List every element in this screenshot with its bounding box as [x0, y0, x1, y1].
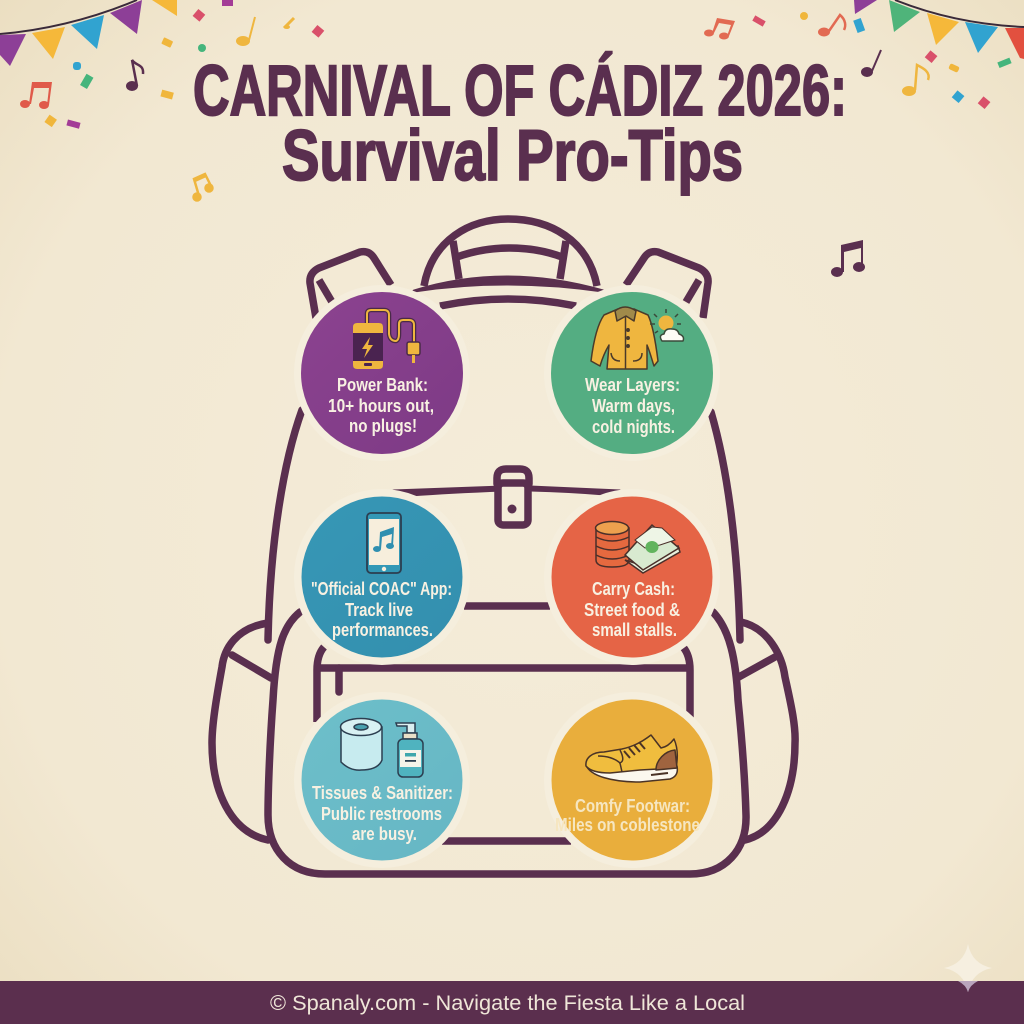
text: tissues tip: are busy.	[352, 824, 417, 844]
footer bar	[0, 981, 1024, 1024]
text: power bank tip: 10+ hours out,	[328, 396, 434, 416]
text: wear layers tip: Wear Layers:	[585, 375, 680, 395]
footer text: © Spanaly.com - Navigate the Fiesta Like a Local	[270, 992, 745, 1015]
icon: tissue roll and sanitizer	[340, 718, 423, 777]
panel: wear layers	[544, 285, 720, 461]
title	[193, 52, 847, 196]
text: footwear tip: Comfy Footwar:	[575, 796, 690, 816]
text: power bank tip: Power Bank:	[337, 375, 428, 395]
bunting: top right	[854, 0, 1024, 59]
text: wear layers tip: cold nights.	[592, 417, 675, 437]
panel: official app	[294, 489, 470, 665]
icon: jacket and weather	[591, 307, 684, 369]
backpack outline	[212, 219, 795, 874]
text: official app tip	[311, 579, 452, 640]
side pocket right	[737, 622, 795, 840]
flap and buckle	[393, 469, 620, 525]
text: power bank tip: no plugs!	[349, 416, 417, 436]
icon: phone with music note	[367, 513, 401, 573]
text: official app tip: "Official COAC" App:	[311, 579, 452, 599]
icon: sneaker	[586, 735, 677, 782]
text: wear layers tip	[585, 375, 680, 437]
text: wear layers tip: Warm days,	[592, 396, 675, 416]
panel: comfy footwear	[544, 692, 720, 868]
text: tissues tip: Tissues & Sanitizer:	[312, 783, 453, 803]
front pocket shell	[268, 612, 746, 874]
icon: power bank and cable	[353, 310, 420, 369]
text: footwear tip	[555, 796, 700, 835]
text: power bank tip	[328, 375, 434, 436]
text: carry cash tip: Street food &	[584, 600, 680, 620]
text: tissues tip: Public restrooms	[321, 804, 442, 824]
panel: tissues and sanitizer	[294, 692, 470, 868]
title: Survival Pro-Tips	[282, 117, 743, 196]
confetti: scattered shapes	[44, 0, 1012, 129]
text: carry cash tip: Carry Cash:	[592, 579, 675, 599]
text: carry cash tip: small stalls.	[592, 620, 677, 640]
main body sides	[268, 410, 302, 640]
shoulder straps	[310, 252, 708, 318]
inner pocket	[317, 647, 690, 841]
side pocket left	[212, 623, 271, 840]
icon: sparkle star	[944, 944, 992, 992]
text: tissues tip	[312, 783, 453, 844]
top handle	[414, 219, 603, 306]
bunting: top left	[0, 0, 177, 66]
panel: power bank	[294, 285, 470, 461]
text: official app tip: Track live	[345, 600, 413, 620]
text: official app tip: performances.	[332, 620, 433, 640]
panel: carry cash	[544, 489, 720, 665]
text: carry cash tip	[584, 579, 680, 640]
icon: coins and banknotes	[596, 522, 680, 573]
icon: music notes, right cluster	[704, 15, 929, 277]
text: footwear tip: Miles on coblestone	[555, 815, 700, 835]
icon: music notes, left cluster	[20, 17, 294, 200]
pocket seam	[464, 602, 550, 610]
